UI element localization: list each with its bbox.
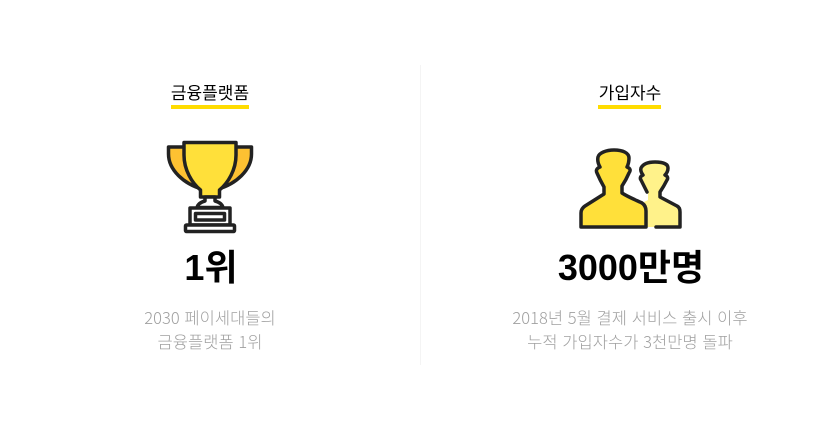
description: subscribers: 2018년 5월 결제 서비스 출시 이후 [512, 305, 748, 329]
icon: trophy [166, 140, 254, 234]
value: subscribers count: 3000만명 [558, 247, 704, 288]
panel: subscribers [512, 84, 748, 353]
description: rank: 금융플랫폼 1위 [158, 329, 262, 353]
center divider [420, 65, 421, 365]
description: rank: 2030 페이세대들의 [144, 305, 276, 329]
description: subscribers: 누적 가입자수가 3천만명 돌파 [527, 329, 733, 353]
heading: financial platform: 금융플랫폼 [171, 84, 249, 103]
description: rank [144, 305, 276, 353]
description: subscribers [512, 305, 748, 353]
panel: financial platform [144, 84, 276, 353]
icon: two people [579, 148, 682, 229]
heading underline [171, 105, 249, 109]
heading underline [598, 105, 661, 109]
value: rank: 1위 [184, 247, 238, 288]
heading: subscribers: 가입자수 [599, 84, 661, 103]
